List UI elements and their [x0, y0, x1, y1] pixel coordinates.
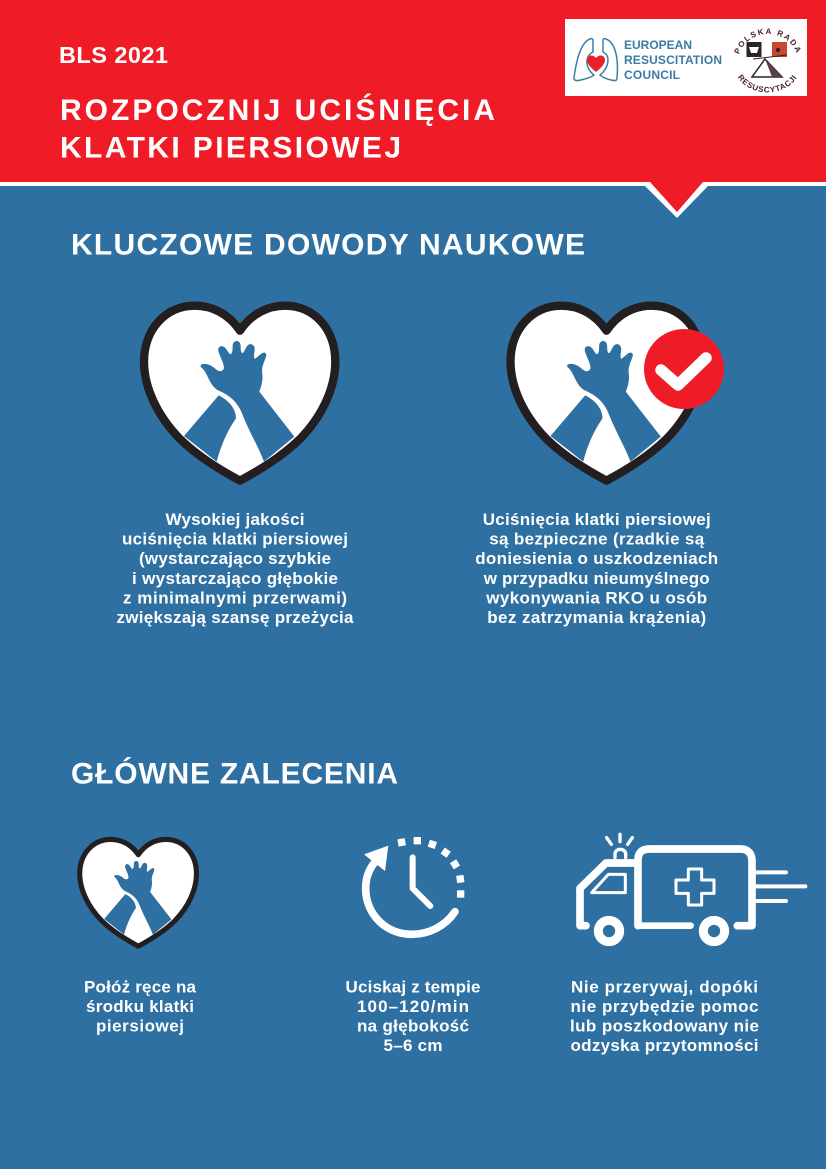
- text: do not interrupt: nie przybędzie pomoc: [570, 997, 758, 1016]
- text: rate and depth: Uciskaj z tempie: [346, 978, 480, 997]
- title: KLATKI PIERSIOWEJ: [60, 132, 401, 164]
- text: hand placement: piersiowej: [96, 1017, 184, 1036]
- text: high quality compressions: zwiększają szansę przeżycia: [116, 608, 354, 627]
- text: high quality compressions: i wystarczająco głębokie: [132, 569, 338, 588]
- icon: heart with CPR hands and check badge: [510, 306, 724, 481]
- logo: ERC wordmark: EUROPEAN: [624, 38, 692, 52]
- logo: red heart: [587, 56, 605, 72]
- text: hand placement: środku klatki: [86, 997, 194, 1016]
- text: do not interrupt: [570, 978, 759, 1055]
- logo: European Resuscitation Council lungs: [574, 39, 617, 81]
- logo: Polska Rada Resuscytacji seal: [734, 28, 801, 92]
- title: [60, 93, 495, 164]
- text: high quality compressions: [116, 510, 354, 627]
- text: high quality compressions: (wystarczająco szybkie: [139, 549, 331, 568]
- title: ROZPOCZNIJ UCIŚNIĘCIA: [60, 93, 495, 127]
- logo: Polska Rada Resuscytacji seal: POLSKA RADA: [734, 28, 801, 54]
- heading: main recommendations: GŁÓWNE ZALECENIA: [71, 756, 398, 790]
- text: do not interrupt: odzyska przytomności: [570, 1036, 758, 1055]
- icon: small heart with CPR hands: [80, 839, 196, 946]
- text: compressions are safe: są bezpieczne (rzadkie są: [489, 530, 705, 549]
- check badge: [644, 329, 724, 409]
- heading: key evidence: KLUCZOWE DOWODY NAUKOWE: [71, 228, 585, 262]
- text: rate and depth: na głębokość: [357, 1017, 469, 1036]
- header banner with pointer: [0, 0, 826, 218]
- text: compressions are safe: w przypadku nieumyślnego: [483, 569, 710, 588]
- text: rate and depth: 100–120/min: [357, 997, 469, 1016]
- text: compressions are safe: bez zatrzymania krążenia): [487, 608, 706, 627]
- text: do not interrupt: Nie przerywaj, dopóki: [571, 978, 758, 997]
- text: rate and depth: 5–6 cm: [384, 1036, 442, 1055]
- logo panel: [565, 19, 807, 96]
- text: high quality compressions: z minimalnymi przerwami): [123, 588, 347, 607]
- header label: BLS 2021: BLS 2021: [59, 42, 168, 68]
- logo: ERC wordmark: [624, 38, 722, 82]
- logo: Polska Rada Resuscytacji seal: RESUSCYTACJI: [738, 74, 797, 92]
- text: hand placement: [84, 978, 197, 1036]
- icon: heart with CPR hands: [144, 306, 335, 481]
- icon: ambulance: [580, 834, 805, 942]
- text: compressions are safe: [475, 510, 718, 627]
- icon: clock with arrow: [364, 837, 464, 934]
- text: compressions are safe: Uciśnięcia klatki piersiowej: [483, 510, 711, 529]
- text: rate and depth: [346, 978, 480, 1055]
- logo: ERC wordmark: RESUSCITATION: [624, 53, 722, 67]
- text: hand placement: Połóż ręce na: [84, 978, 197, 997]
- logo: ERC wordmark: COUNCIL: [624, 68, 680, 82]
- text: do not interrupt: lub poszkodowany nie: [570, 1017, 759, 1036]
- text: compressions are safe: doniesienia o uszkodzeniach: [475, 549, 718, 568]
- text: high quality compressions: Wysokiej jakości: [166, 510, 304, 529]
- text: high quality compressions: uciśnięcia klatki piersiowej: [122, 530, 348, 549]
- text: compressions are safe: wykonywania RKO u osób: [485, 588, 707, 607]
